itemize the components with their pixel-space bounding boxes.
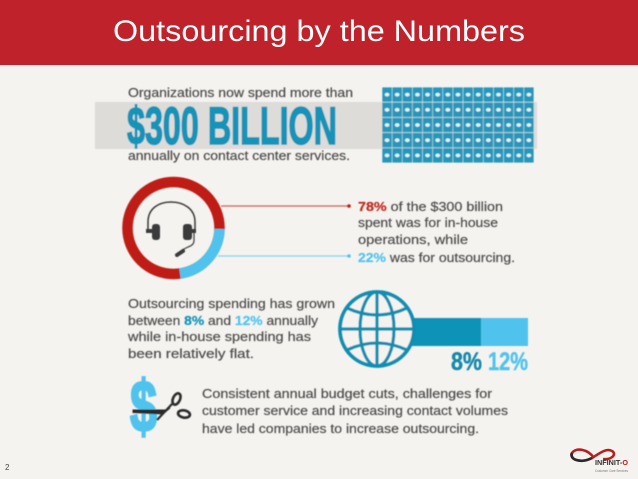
growth text xyxy=(127,296,335,361)
icon: grid of banknotes xyxy=(382,87,534,163)
budget text xyxy=(202,386,509,436)
split text xyxy=(358,199,515,265)
header banner xyxy=(0,0,638,65)
panel: spending split donut xyxy=(128,182,515,274)
split text: 78% of the $300 billion xyxy=(358,199,503,214)
panel: infographic body xyxy=(95,85,537,447)
donut chart xyxy=(128,182,220,274)
logo: Infinit-O: Customer Care Services xyxy=(595,468,628,473)
icon: dollar sign: $ xyxy=(130,367,157,447)
split text: spent was for in-house xyxy=(358,215,498,230)
big number: $300 BILLION xyxy=(127,97,337,156)
icon: scissors xyxy=(133,392,191,420)
bar: 12% xyxy=(481,318,528,346)
label: 12%: 12% xyxy=(488,348,528,376)
title: Outsourcing by the Numbers xyxy=(113,15,525,48)
red leader line xyxy=(221,204,351,208)
budget text: Consistent annual budget cuts, challenges for xyxy=(202,386,493,401)
icon: globe xyxy=(340,292,414,366)
growth text: been relatively flat. xyxy=(128,346,254,361)
panel: $300 billion xyxy=(95,85,537,163)
intro text: Organizations now spend more than xyxy=(128,85,353,100)
label: 8%: 8% xyxy=(451,348,482,376)
page number: 2 xyxy=(5,463,10,472)
closing text: annually on contact center services. xyxy=(128,148,350,163)
panel: growth xyxy=(127,292,528,376)
budget text: customer service and increasing contact volumes xyxy=(202,403,509,418)
icon: headset xyxy=(146,202,196,255)
growth text: while in-house spending has xyxy=(127,329,312,344)
blue leader line xyxy=(218,254,351,258)
logo: Infinit-O: INFINIT-O xyxy=(595,458,628,467)
growth text: between 8% and 12% annually xyxy=(128,313,319,328)
budget text: have led companies to increase outsourcing. xyxy=(202,421,479,436)
split text: operations, while xyxy=(358,232,468,247)
grey band xyxy=(95,102,537,149)
logo: Infinit-O xyxy=(572,450,628,473)
split text: 22% was for outsourcing. xyxy=(358,250,515,265)
growth text: Outsourcing spending has grown xyxy=(128,296,335,311)
panel: budget cuts xyxy=(130,367,509,447)
bar: 8% xyxy=(410,318,481,346)
